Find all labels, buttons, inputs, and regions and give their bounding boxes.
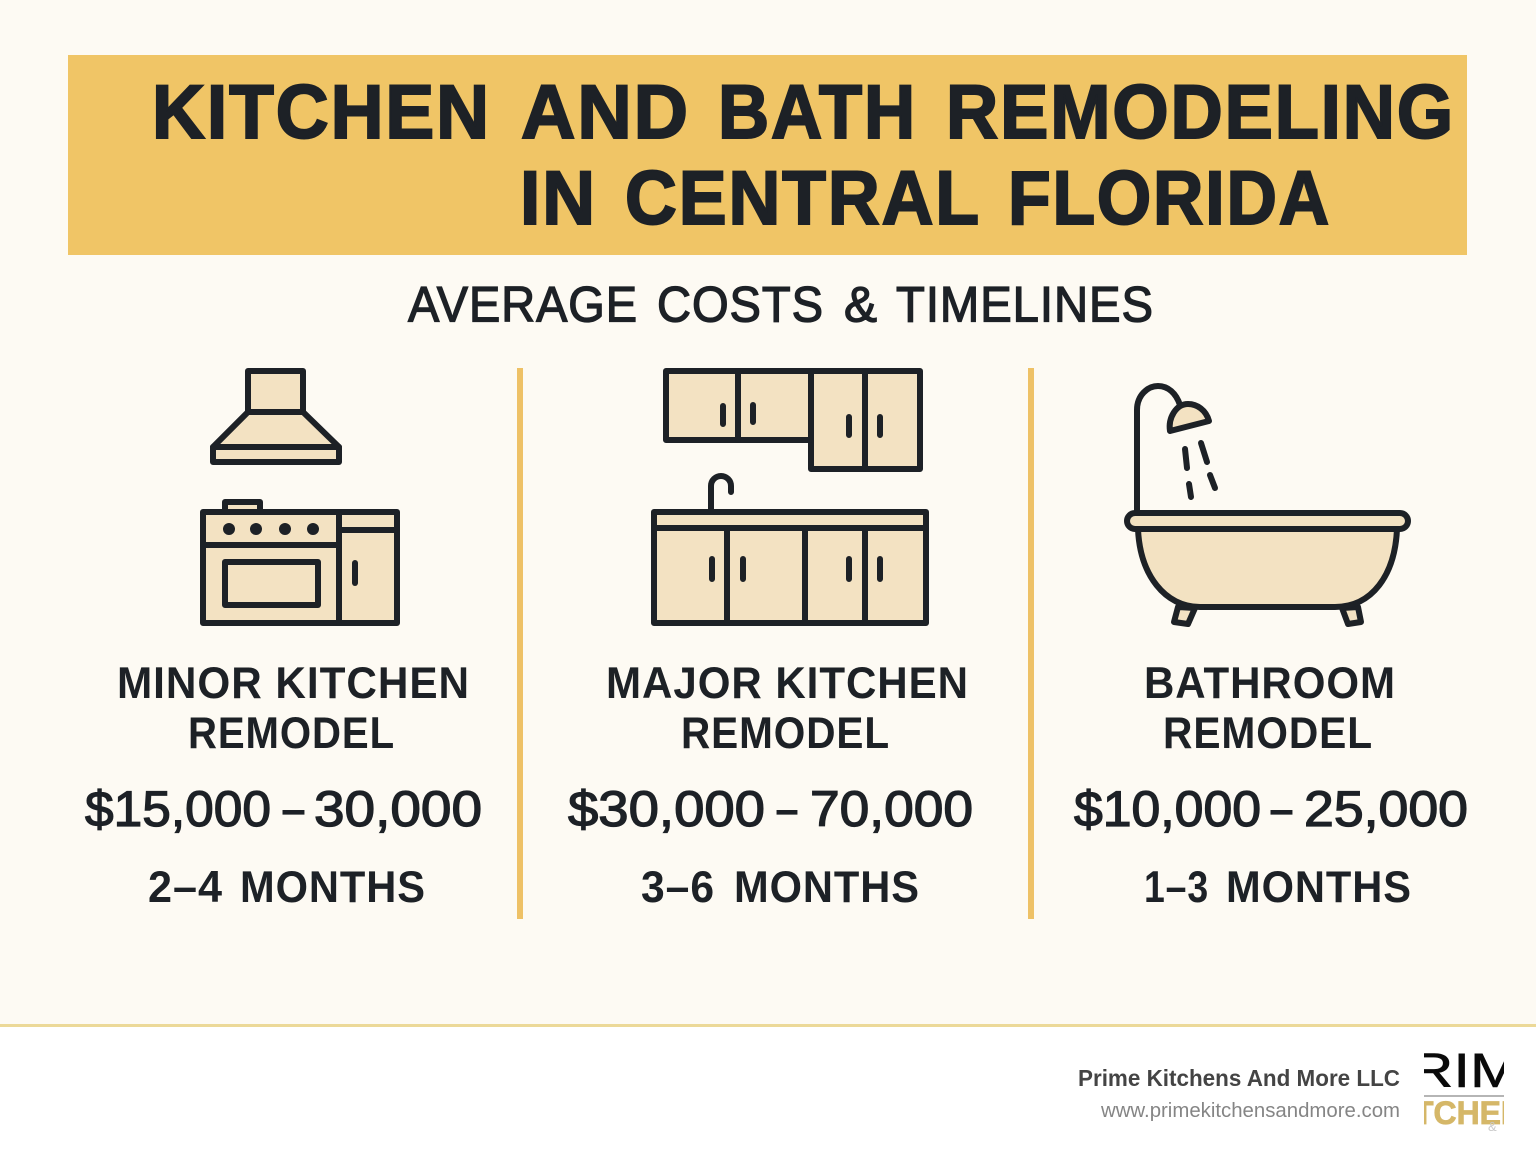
title line 2: CENTRAL xyxy=(625,156,981,241)
timeline: bathroom: MONTHS xyxy=(1226,863,1412,912)
title line 1: BATH xyxy=(718,70,917,155)
title line 1: AND xyxy=(521,70,690,155)
panel: bathroom remodel xyxy=(1074,386,1468,912)
heading: major kitchen remodel: MAJOR KITCHEN xyxy=(606,659,969,708)
timeline: minor kitchen xyxy=(148,863,426,912)
price: bathroom xyxy=(1074,780,1468,837)
heading: minor kitchen remodel: REMODEL xyxy=(188,709,395,758)
logo xyxy=(1410,1045,1524,1134)
price: major kitchen: $30,000 xyxy=(568,781,765,837)
timeline: bathroom: 1–3 xyxy=(1144,863,1209,912)
subtitle: TIMELINES xyxy=(896,276,1154,332)
company name: Prime Kitchens And More LLC xyxy=(1078,1065,1400,1091)
price: major kitchen: – xyxy=(777,780,797,836)
logo: TCHEN xyxy=(1414,1095,1524,1131)
icon: range hood xyxy=(213,371,339,462)
price: bathroom: – xyxy=(1271,780,1292,836)
panel: minor kitchen remodel xyxy=(85,371,482,912)
heading: major kitchen remodel xyxy=(606,659,969,758)
subtitle: COSTS xyxy=(657,276,824,332)
timeline: minor kitchen: MONTHS xyxy=(240,863,426,912)
icon: kitchen cabinets and sink xyxy=(654,371,926,623)
price: minor kitchen: $15,000 xyxy=(85,781,271,837)
heading: bathroom remodel xyxy=(1144,659,1396,758)
subtitle: & xyxy=(844,276,878,332)
title line 2 xyxy=(520,156,1331,241)
footer xyxy=(0,1024,1536,1154)
website: www.primekitchensandmore.com xyxy=(1100,1100,1400,1122)
price: major kitchen xyxy=(568,780,973,837)
heading: bathroom remodel: BATHROOM xyxy=(1144,659,1396,708)
timeline: major kitchen xyxy=(641,863,920,912)
subtitle xyxy=(408,276,1154,332)
heading: minor kitchen remodel xyxy=(117,659,470,758)
icon: bathtub with shower xyxy=(1127,386,1408,624)
timeline: bathroom xyxy=(1144,863,1412,912)
subtitle: AVERAGE xyxy=(408,276,638,332)
price: minor kitchen: 30,000 xyxy=(314,781,482,837)
icon: stove and cabinet xyxy=(203,502,397,623)
column divider left xyxy=(517,368,523,919)
logo: & xyxy=(1488,1119,1497,1134)
title line 2: IN xyxy=(520,156,597,241)
title line 1: KITCHEN xyxy=(152,70,491,155)
price: minor kitchen xyxy=(85,780,482,837)
title banner xyxy=(68,55,1467,255)
heading: major kitchen remodel: REMODEL xyxy=(681,709,890,758)
title line 2: FLORIDA xyxy=(1008,156,1331,241)
heading: minor kitchen remodel: MINOR KITCHEN xyxy=(117,659,470,708)
logo: RIM xyxy=(1410,1045,1520,1098)
price: bathroom: 25,000 xyxy=(1304,781,1468,837)
price: bathroom: $10,000 xyxy=(1074,781,1261,837)
price: major kitchen: 70,000 xyxy=(810,781,973,837)
price: minor kitchen: – xyxy=(283,780,304,836)
panel: major kitchen remodel xyxy=(568,371,973,912)
heading: bathroom remodel: REMODEL xyxy=(1163,709,1373,758)
timeline: minor kitchen: 2–4 xyxy=(148,863,223,912)
column divider right xyxy=(1028,368,1034,919)
title line 1: REMODELING xyxy=(946,70,1455,155)
timeline: major kitchen: MONTHS xyxy=(734,863,920,912)
title line 1 xyxy=(152,70,1455,155)
timeline: major kitchen: 3–6 xyxy=(641,863,715,912)
